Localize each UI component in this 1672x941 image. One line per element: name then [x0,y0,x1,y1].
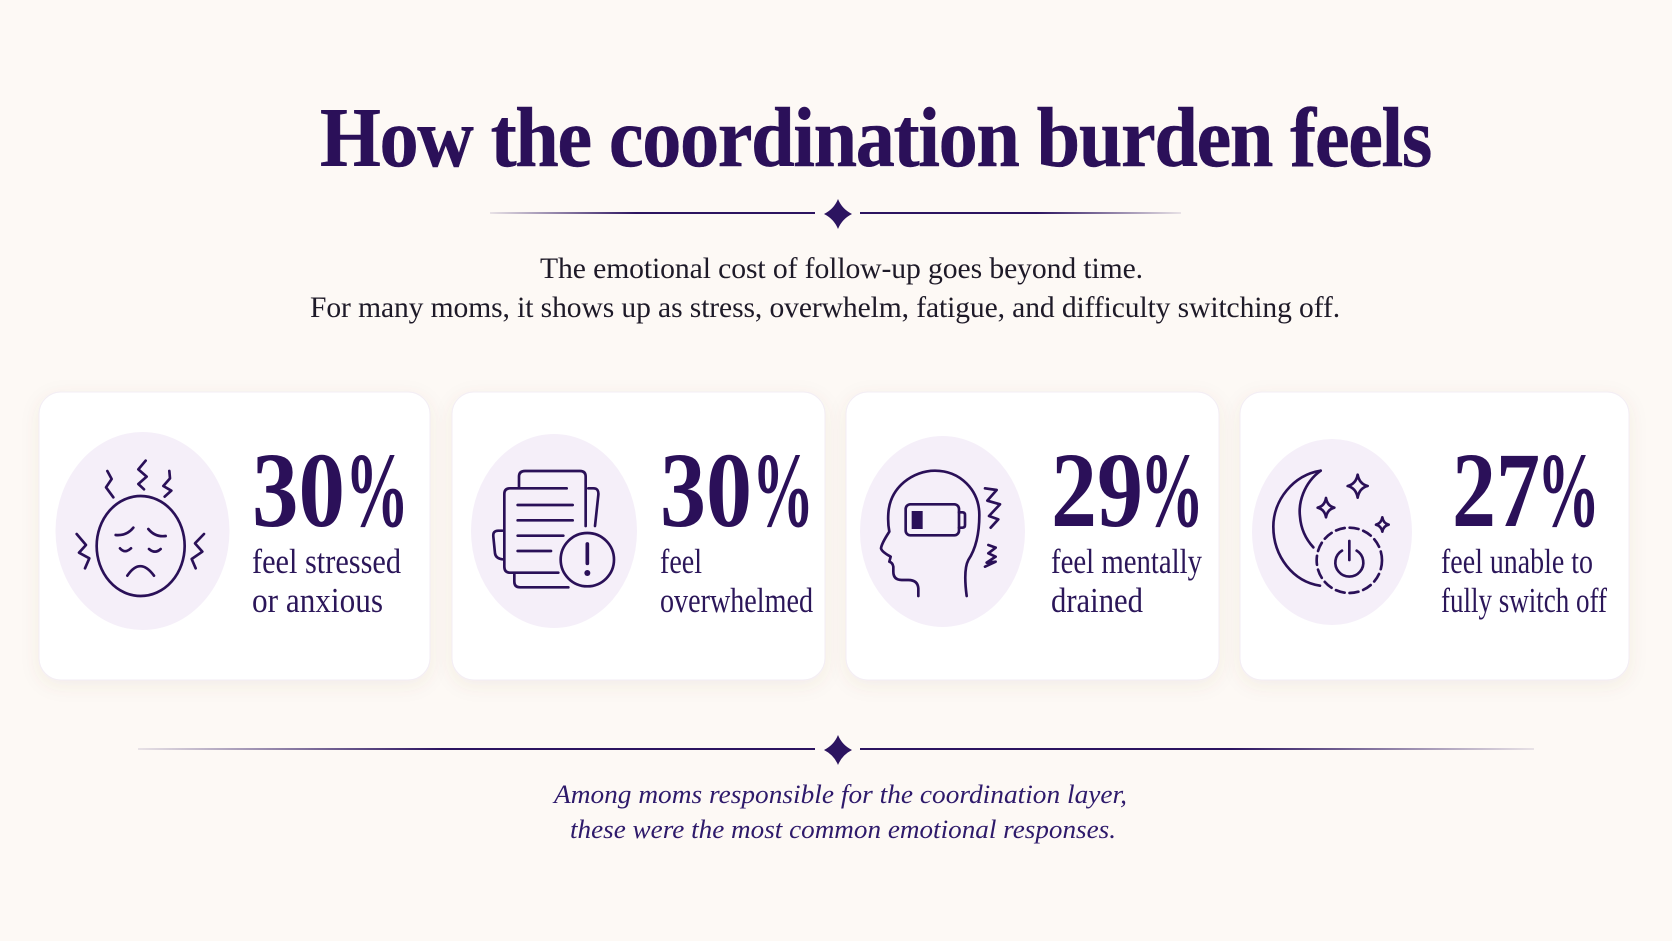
footnote: Among moms responsible for the coordination layer, [552,780,1127,809]
stat: 30% [660,432,814,550]
subtitle [310,252,1340,324]
panel: unable to switch off [1240,392,1629,680]
top divider with star [490,199,1181,229]
footnote: these were the most common emotional responses. [570,815,1116,844]
label: feel unable to fully switch off [1441,542,1607,620]
panel: overwhelmed [452,392,825,680]
bottom divider with star [138,735,1534,765]
icon: stressed face [77,461,204,596]
panel: mentally drained [846,392,1219,680]
stat: 30% [252,432,409,550]
label: feel overwhelmed: feel [660,542,702,581]
label: feel stressed or anxious [252,542,401,620]
icon: head with low battery [881,471,1000,596]
label: feel unable to fully switch off: fully switch off [1441,581,1607,620]
stat: 29%: 29 [1051,432,1143,550]
footnote [552,780,1127,844]
stat: 27%: 27 [1452,432,1540,550]
label: feel mentally drained [1051,542,1202,620]
stat: 29% [1051,432,1204,550]
stat: 27%: % [1537,432,1600,550]
label: feel stressed or anxious: feel stressed [252,542,401,581]
title: How the coordination burden feels [320,91,1431,185]
label: feel mentally drained: drained [1051,581,1143,620]
label: feel overwhelmed: overwhelmed [660,581,813,620]
label: feel mentally drained: feel mentally [1051,542,1202,581]
icon: documents with alert [493,471,614,587]
stat: 30%: 30 [660,432,752,550]
label: feel unable to fully switch off: feel unable to [1441,542,1593,581]
stat: 30%: 30 [252,432,345,550]
label: feel stressed or anxious: or anxious [252,581,383,620]
icon: moon, stars and power button [1273,471,1389,593]
subtitle: The emotional cost of follow-up goes beyond time. [540,252,1143,285]
subtitle: For many moms, it shows up as stress, overwhelm, fatigue, and difficulty switching off. [310,291,1340,324]
label: feel overwhelmed [660,542,813,620]
panel: stressed or anxious [39,392,430,680]
stat: 30%: % [752,432,814,550]
stat: 30%: % [345,432,409,550]
stat: 29%: % [1140,432,1204,550]
